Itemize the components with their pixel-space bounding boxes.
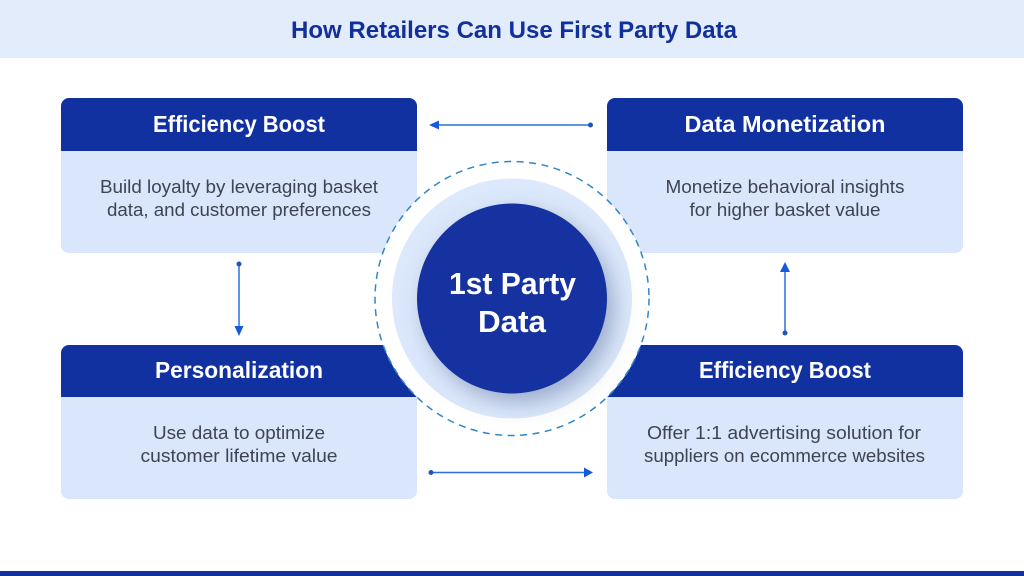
center circle: [375, 162, 649, 436]
panel: efficiency boost top left: [61, 98, 417, 253]
arrow: top left to bottom left: [234, 262, 244, 336]
arrow: bottom right to top right: [780, 262, 790, 336]
title: How Retailers Can Use First Party Data: [291, 17, 737, 44]
panel: data monetization top right: Monetize behavioral insights: [666, 177, 904, 197]
panel: data monetization top right: [607, 98, 963, 253]
center circle: Data: [478, 304, 547, 339]
panel: data monetization top right: Data Monetization: [684, 111, 886, 137]
panel: personalization bottom left: [61, 345, 417, 499]
title banner: [0, 0, 1024, 58]
panel: personalization bottom left: Use data to optimize: [153, 423, 325, 443]
panel: efficiency boost top left: Efficiency Boost: [153, 111, 325, 137]
panel: efficiency boost bottom right: Offer 1:1 advertising solution for: [647, 423, 921, 443]
panel: data monetization top right: for higher basket value: [690, 200, 880, 220]
panel: efficiency boost bottom right: suppliers on ecommerce websites: [644, 446, 925, 466]
arrow: top right to top left: [429, 120, 593, 130]
footer bar: [0, 571, 1024, 576]
panel: efficiency boost top left: data, and customer preferences: [107, 200, 371, 220]
panel: personalization bottom left: Personalization: [155, 357, 323, 383]
panel: efficiency boost top left: Build loyalty by leveraging basket: [100, 177, 378, 197]
panel: personalization bottom left: customer lifetime value: [140, 446, 338, 466]
panel: efficiency boost bottom right: Efficiency Boost: [699, 357, 871, 383]
center circle: 1st Party: [449, 266, 577, 301]
arrow: bottom left to bottom right: [428, 468, 593, 478]
panel: efficiency boost bottom right: [607, 345, 963, 499]
